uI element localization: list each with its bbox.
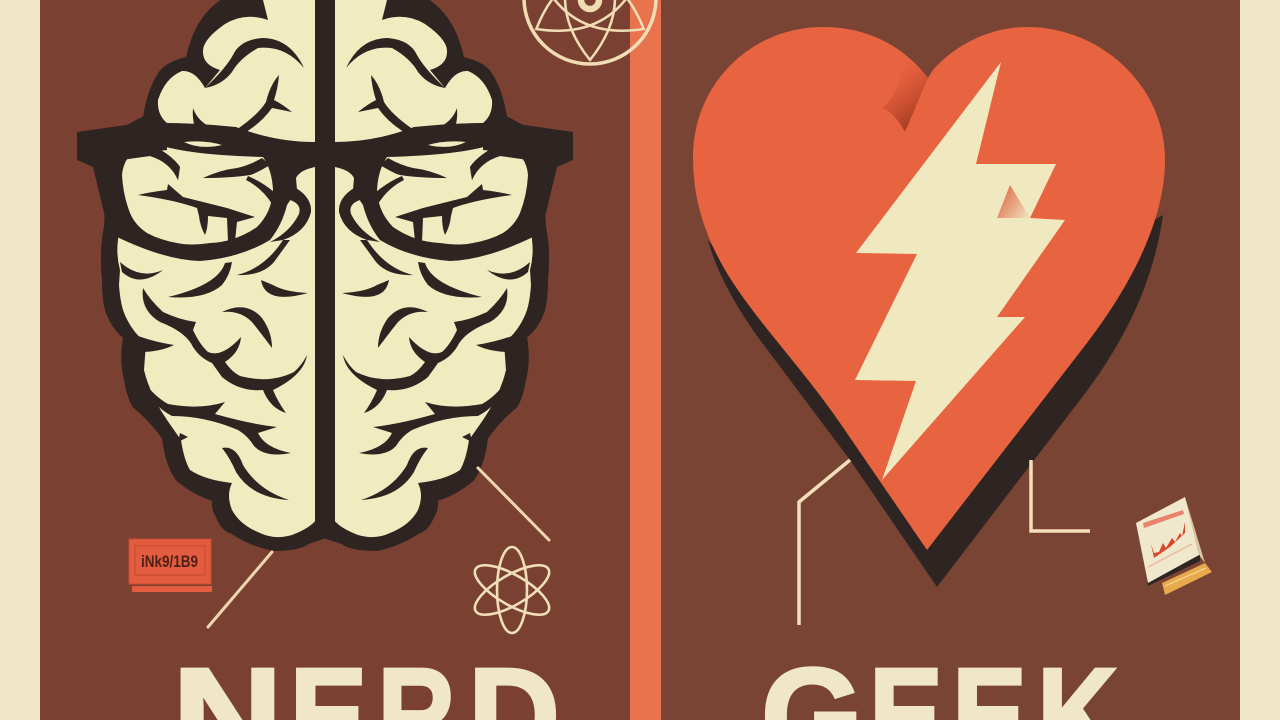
frame highlight left bbox=[184, 141, 222, 147]
brain with glasses bbox=[77, 0, 573, 550]
heart bbox=[693, 27, 1165, 550]
glasses left half bbox=[77, 123, 326, 261]
card face bbox=[1136, 497, 1199, 583]
lower faint band bbox=[1148, 544, 1192, 567]
glasses bbox=[77, 123, 573, 261]
pad stripe bbox=[1165, 568, 1206, 586]
card side bbox=[1185, 497, 1205, 563]
brain folds bbox=[120, 38, 311, 500]
panel: nerd bbox=[40, 0, 630, 720]
icon: circled atom at top bbox=[524, 0, 656, 64]
brain cream fill bbox=[117, 0, 316, 537]
connector line: nerd lower left bbox=[208, 552, 272, 627]
heart with lightning bolt bbox=[693, 27, 1165, 587]
title: geek bbox=[761, 640, 1118, 720]
icon: red note card bbox=[129, 539, 212, 592]
centre divider stripe bbox=[630, 0, 661, 720]
card edge bbox=[1147, 555, 1200, 586]
connector line: geek left bbox=[799, 460, 850, 625]
icon: tilted chart card bbox=[1136, 497, 1212, 595]
icon: atom bbox=[468, 547, 556, 633]
chart bbox=[1151, 522, 1185, 558]
glasses right half bbox=[324, 123, 573, 261]
right brain hemisphere bbox=[324, 0, 548, 550]
frame highlight right bbox=[428, 141, 466, 147]
lightning bolt bbox=[855, 62, 1065, 480]
brain outline bbox=[102, 0, 326, 550]
connector line: nerd lower right bbox=[478, 468, 549, 540]
lens fold right bbox=[470, 143, 528, 180]
heart fold shading bbox=[882, 52, 928, 132]
heart shadow bbox=[708, 215, 1163, 587]
lens fold left bbox=[122, 143, 180, 180]
connector line: geek right bbox=[1031, 460, 1090, 531]
title: nerd bbox=[172, 640, 560, 720]
card inner frame bbox=[135, 546, 205, 575]
panel: geek bbox=[661, 0, 1240, 720]
yellow pad bbox=[1162, 563, 1212, 595]
left brain hemisphere bbox=[102, 0, 326, 550]
card bbox=[129, 539, 211, 584]
central divide bbox=[315, 0, 335, 535]
card label: iNk9/1B9 bbox=[141, 552, 198, 571]
card shadow layer bbox=[132, 586, 212, 592]
chart band bbox=[1143, 510, 1184, 528]
bolt notch shading bbox=[997, 185, 1030, 218]
